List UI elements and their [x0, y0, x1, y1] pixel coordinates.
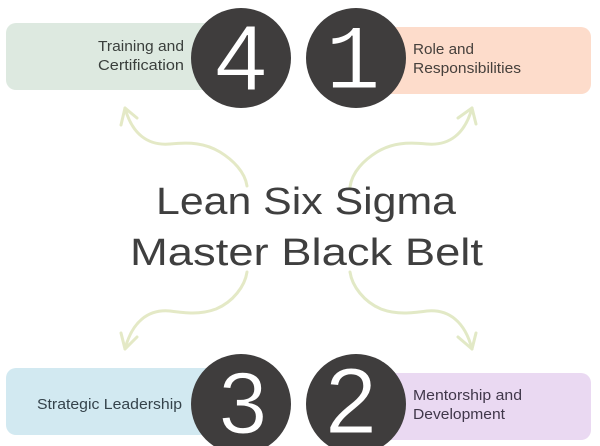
panel: role and responsibilities: Role and — [413, 42, 474, 58]
panel: strategic leadership: Strategic Leadership — [37, 397, 182, 413]
number badge 1: 1 — [325, 11, 381, 116]
number badge 2 — [306, 349, 406, 446]
arrow: to training and certification — [121, 108, 247, 186]
panel: training and certification: Certification — [98, 58, 184, 74]
panel: mentorship and development: Development — [413, 407, 505, 423]
panel: role and responsibilities: Responsibilities — [413, 61, 521, 77]
panel: strategic leadership — [6, 368, 231, 435]
number badge 4: 4 — [215, 6, 267, 110]
panel: training and certification — [6, 23, 231, 90]
arrow: to strategic leadership — [121, 272, 247, 349]
number badge 1 — [306, 8, 406, 116]
title: Lean Six Sigma — [156, 181, 457, 223]
panel: mentorship and development: Mentorship and — [413, 388, 522, 404]
panel: training and certification: Training and — [98, 39, 184, 55]
title — [130, 181, 484, 274]
arrow: to role and responsibilities — [350, 108, 476, 187]
panel: mentorship and development — [366, 373, 591, 440]
number badge 4 — [191, 6, 291, 110]
number badge 3 — [191, 354, 291, 446]
arrow: to mentorship and development — [350, 272, 476, 349]
panel: role and responsibilities — [366, 27, 591, 94]
title: Master Black Belt — [130, 232, 484, 274]
